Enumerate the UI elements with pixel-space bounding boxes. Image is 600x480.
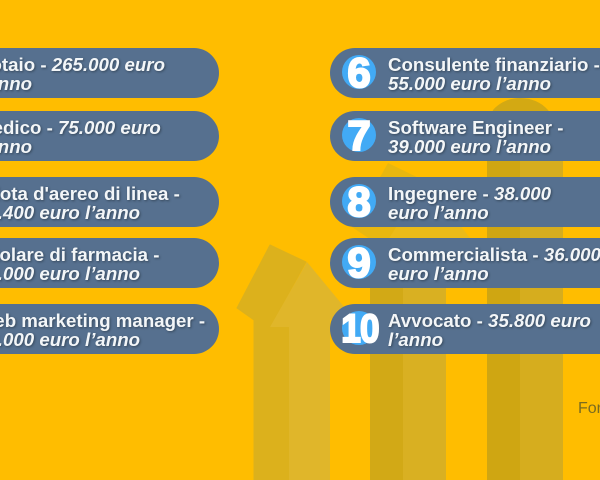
text: Commercialista	[388, 244, 600, 284]
text: Ingegnere: Ingegnere - 38.000	[388, 182, 551, 204]
arrow: small	[237, 245, 345, 480]
pill: rank 9	[330, 238, 600, 288]
text: Software Engineer: Software Engineer -	[388, 116, 564, 138]
text: Medico	[0, 116, 162, 157]
text: Notaio	[0, 54, 166, 94]
text: Avvocato: l’anno	[388, 329, 443, 350]
badge: number 9	[342, 245, 376, 279]
text: Avvocato	[388, 310, 592, 350]
text: Consulente finanziario: Consulente finanziario -	[388, 54, 600, 74]
badge: number 7	[342, 118, 376, 152]
badge: number 6: 6	[347, 49, 371, 96]
text: Ingegnere	[388, 182, 553, 223]
badge: number 8: 8	[347, 178, 371, 225]
pill: rank 5	[0, 304, 219, 354]
badge: number 6	[342, 55, 376, 89]
arrow: medium	[352, 163, 470, 480]
text: Consulente finanziario	[388, 54, 600, 94]
badge: number 9: 9	[347, 239, 371, 286]
text: Pilota	[0, 182, 181, 223]
arrow: large	[487, 98, 563, 480]
text: Avvocato: Avvocato - 35.800 euro	[388, 310, 591, 330]
text: Commercialista: euro l’anno	[388, 263, 489, 284]
pill: rank 6	[330, 48, 600, 98]
pill: rank 2	[0, 111, 219, 161]
text: Web marketing manager	[0, 310, 206, 350]
text: Software Engineer	[388, 116, 564, 157]
pill: rank 1	[0, 48, 219, 98]
pill: rank 8	[330, 177, 600, 227]
text: Titolare di farmacia	[0, 244, 160, 284]
pill: rank 4	[0, 238, 219, 288]
badge: number 8	[342, 184, 376, 218]
badge: number 7: 7	[347, 112, 371, 159]
badge: number 10: 10	[341, 307, 379, 351]
pill: rank 10	[330, 304, 600, 354]
pill: rank 7	[330, 111, 600, 161]
text: Commercialista: Commercialista - 36.000	[388, 244, 600, 264]
text: Software Engineer: 39.000 euro l’anno	[388, 136, 551, 157]
text: Consulente finanziario: 55.000 euro l’anno	[388, 73, 551, 94]
pill: rank 3	[0, 177, 219, 227]
text: Ingegnere: euro l’anno	[388, 202, 489, 223]
